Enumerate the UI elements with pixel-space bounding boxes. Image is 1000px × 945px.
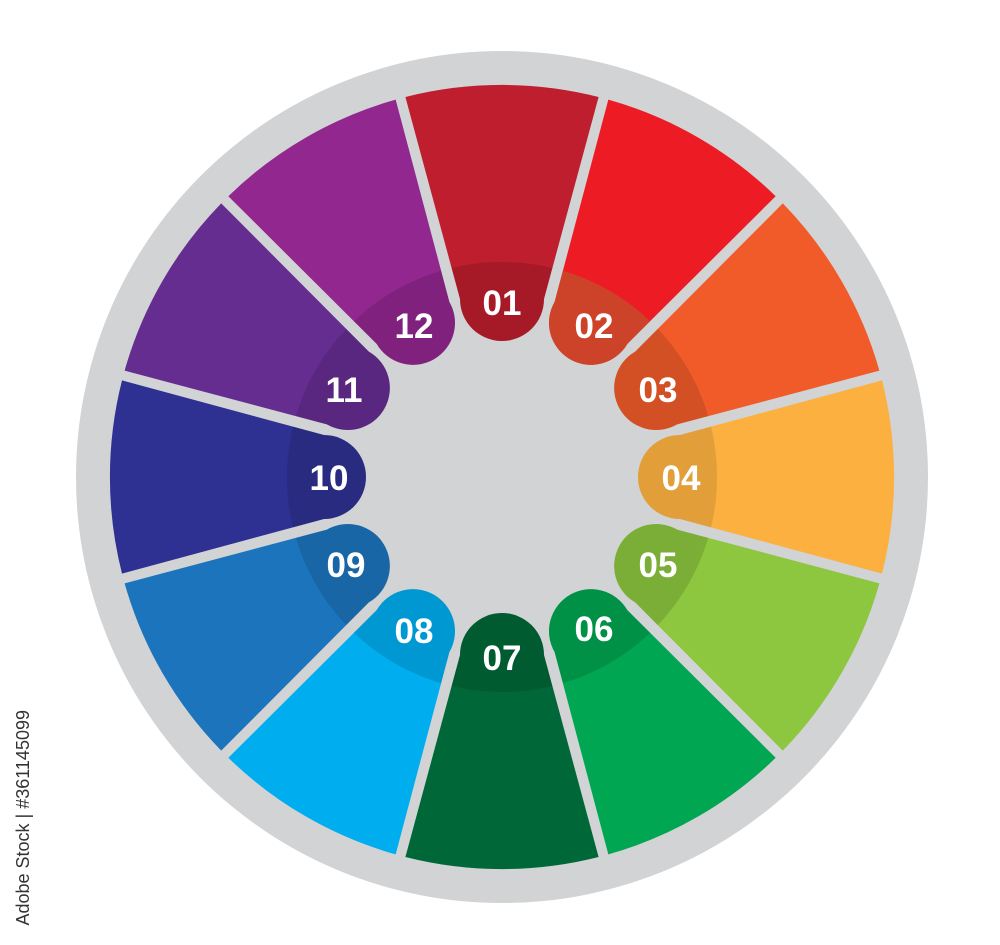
number labels: 11 xyxy=(326,371,362,410)
number labels: 06 xyxy=(575,610,613,649)
segment 12 xyxy=(228,100,455,365)
number labels: 09 xyxy=(327,546,365,585)
segment 02 xyxy=(549,100,776,365)
segment 03 xyxy=(614,203,880,430)
stock id text: Adobe Stock | #361145099 xyxy=(13,710,33,926)
number labels: 07 xyxy=(483,639,521,678)
number labels: 05 xyxy=(639,546,677,585)
segment 09 xyxy=(124,524,390,751)
segment 11 xyxy=(124,203,390,430)
number labels: 04 xyxy=(662,459,701,498)
segment 06 xyxy=(549,589,776,854)
wheel segments xyxy=(110,85,894,869)
segment 07 xyxy=(405,613,599,869)
number labels: 01 xyxy=(483,284,521,323)
segment 01 xyxy=(405,85,599,341)
segment 10 xyxy=(110,380,366,574)
segment 05 xyxy=(614,524,880,751)
outer gray ring xyxy=(76,51,928,903)
number labels: 10 xyxy=(310,459,348,498)
number labels: 02 xyxy=(575,307,613,346)
number labels xyxy=(310,284,701,678)
segment 08 xyxy=(228,589,455,854)
segment 04 xyxy=(638,380,894,574)
number labels: 08 xyxy=(395,612,433,651)
number labels: 03 xyxy=(639,371,677,410)
number labels: 12 xyxy=(395,307,433,346)
